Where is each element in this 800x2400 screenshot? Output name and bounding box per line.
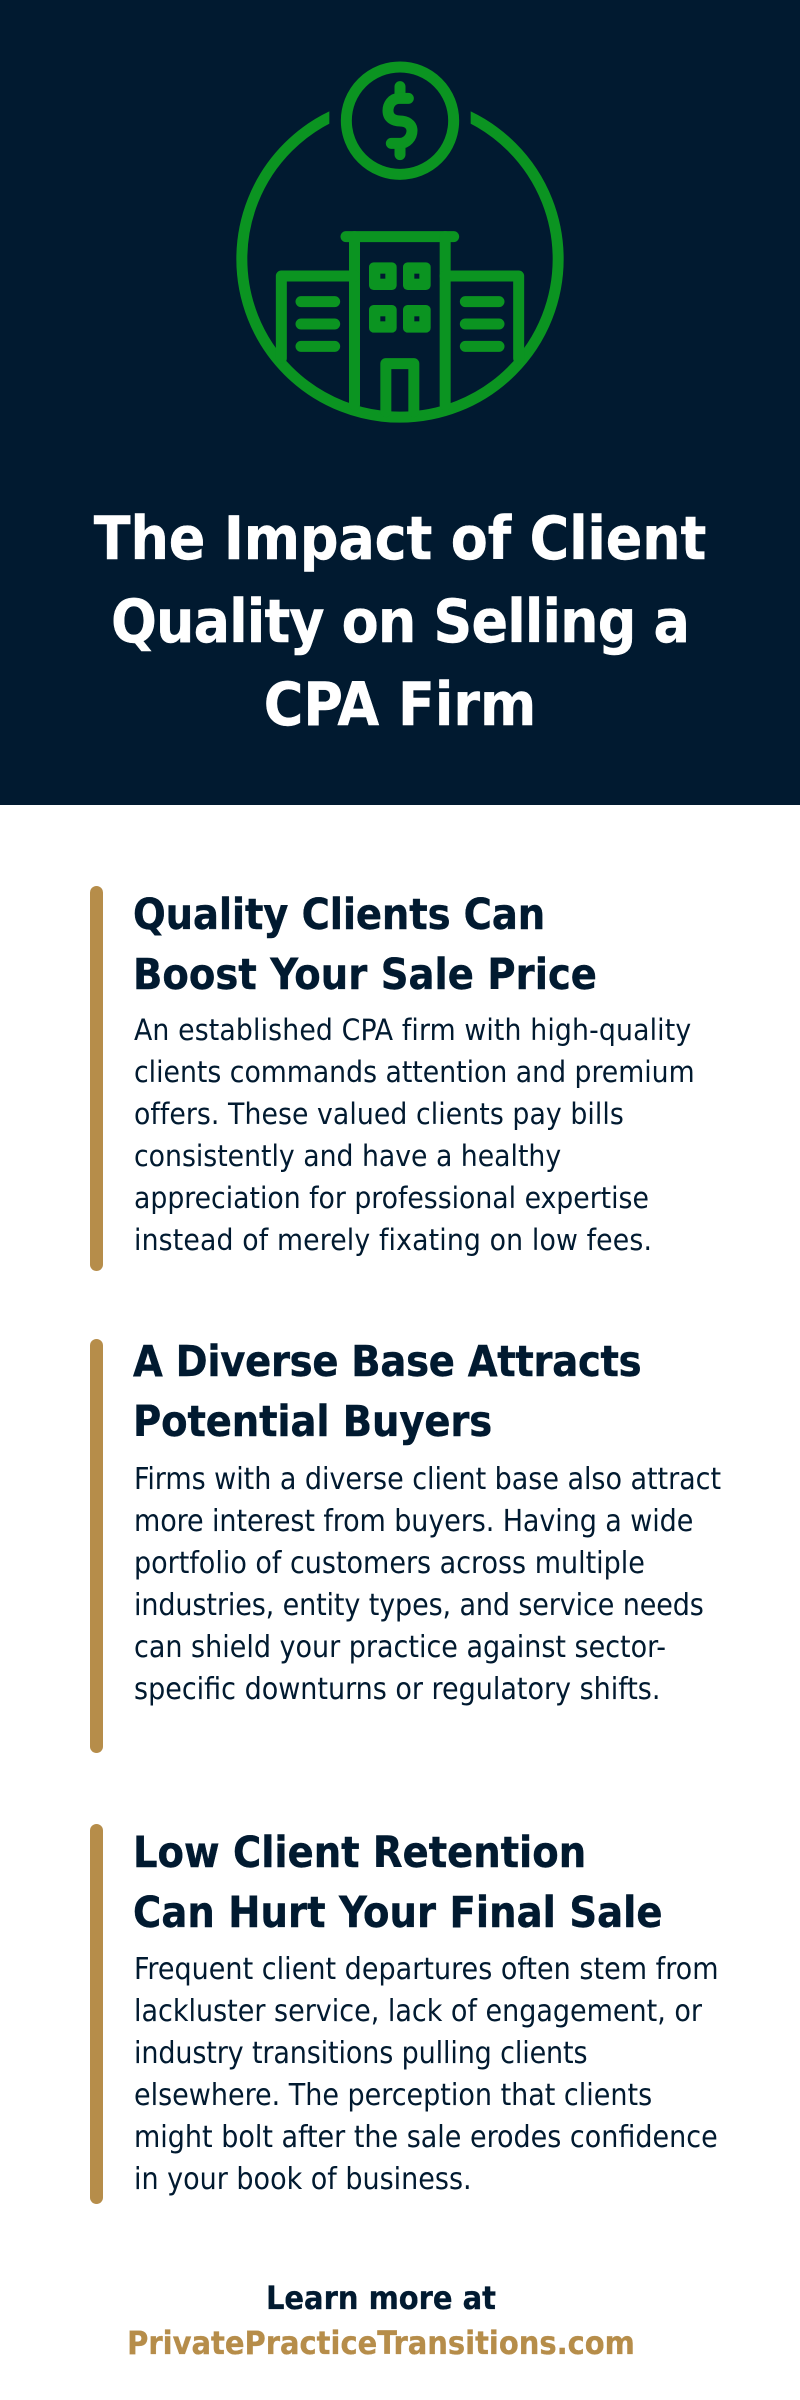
body text: industries, entity types, and service needs <box>134 1588 704 1622</box>
panel: low retention <box>90 1824 719 2204</box>
call to action: Learn more at <box>266 2279 496 2317</box>
title: Quality on Selling a <box>111 586 689 656</box>
icon: office building with dollar coin <box>236 62 564 423</box>
accent bar <box>90 886 102 1271</box>
accent bar <box>90 1824 102 2204</box>
heading: Potential Buyers <box>133 1397 492 1447</box>
panel: quality clients <box>90 886 695 1271</box>
panel: diverse base <box>90 1337 721 1753</box>
body text: clients commands attention and premium <box>134 1054 695 1090</box>
heading: Boost Your Sale Price <box>133 950 597 1000</box>
body text: elsewhere. The perception that clients <box>134 2078 652 2112</box>
body text: offers. These valued clients pay bills <box>134 1096 624 1132</box>
title: CPA Firm <box>264 670 536 740</box>
body text: specific downturns or regulatory shifts. <box>134 1672 660 1706</box>
heading <box>132 1337 641 1447</box>
body text: in your book of business. <box>134 2162 472 2196</box>
body text: portfolio of customers across multiple <box>134 1546 645 1580</box>
heading: Low Client Retention <box>133 1828 586 1878</box>
accent bar <box>90 1339 102 1753</box>
body text <box>134 1012 695 1258</box>
title <box>94 504 706 740</box>
body text: An established CPA firm with high-quality <box>134 1012 691 1048</box>
body text: might bolt after the sale erodes confidence <box>134 2120 718 2154</box>
body text: consistently and have a healthy <box>134 1138 561 1174</box>
body text: appreciation for professional expertise <box>134 1180 649 1216</box>
body text: instead of merely fixating on low fees. <box>134 1222 652 1258</box>
body text <box>134 1952 719 2196</box>
call to action: PrivatePracticeTransitions.com <box>127 2324 635 2362</box>
heading: A Diverse Base Attracts <box>133 1337 641 1387</box>
heading: Can Hurt Your Final Sale <box>133 1888 663 1938</box>
header banner <box>0 0 800 805</box>
body text: industry transitions pulling clients <box>134 2036 587 2070</box>
body text: Firms with a diverse client base also attract <box>134 1462 721 1496</box>
call to action <box>127 2279 635 2362</box>
body text <box>134 1462 721 1706</box>
body text: more interest from buyers. Having a wide <box>134 1504 693 1538</box>
body text: lackluster service, lack of engagement, or <box>134 1994 702 2028</box>
heading <box>133 1828 663 1938</box>
heading <box>133 890 597 1000</box>
body text: can shield your practice against sector- <box>134 1630 666 1664</box>
body text: Frequent client departures often stem from <box>134 1952 719 1986</box>
heading: Quality Clients Can <box>133 890 545 940</box>
title: The Impact of Client <box>94 504 706 574</box>
